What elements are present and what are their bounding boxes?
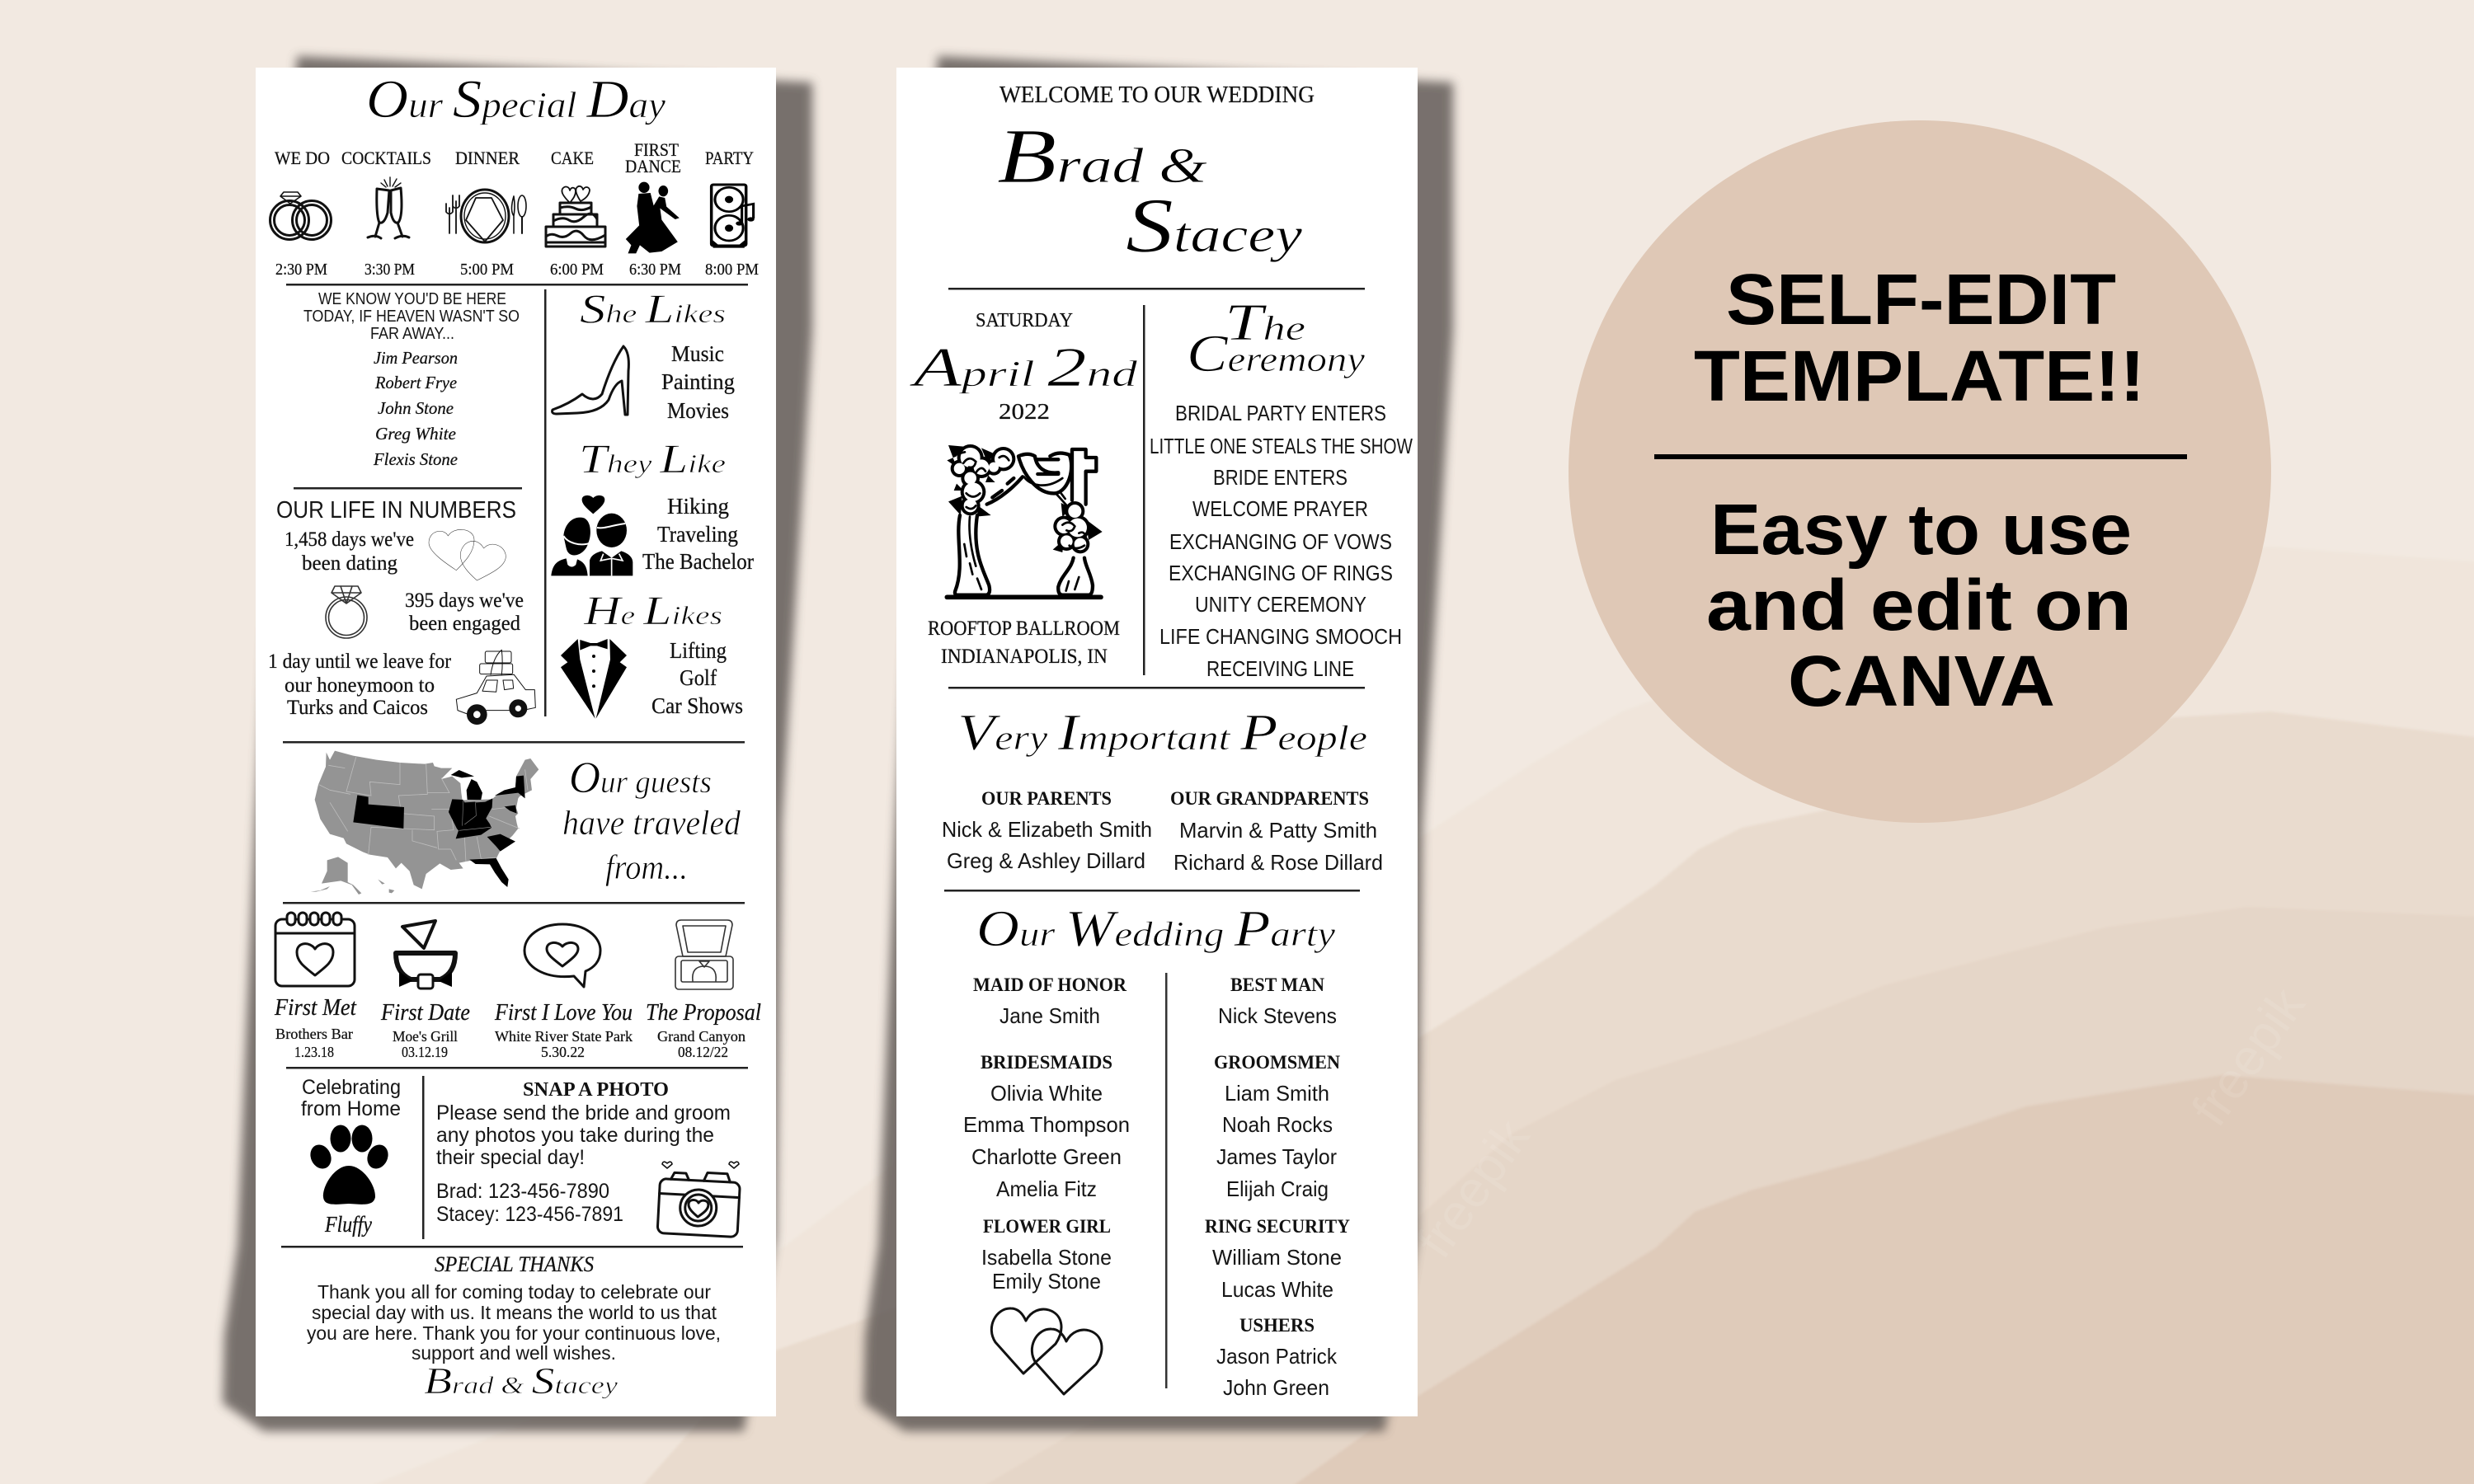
list: our grandparents: Marvin & Patty Smith: [1179, 818, 1377, 843]
heading: he likes: H e Likes: [583, 587, 722, 633]
list: groom's side: USHERS: [1239, 1315, 1315, 1336]
watermark: freepik: [1406, 977, 2316, 1268]
names: brad and stacey: Stacey: [1126, 183, 1302, 269]
date block: SATURDAY: [976, 310, 1073, 331]
list: our parents: Greg & Ashley Dillard: [947, 848, 1145, 873]
icon: nachos bowl: [396, 921, 455, 989]
list: ceremony order: EXCHANGING OF VOWS: [1169, 529, 1392, 554]
icon: interlocked hearts: [991, 1308, 1102, 1394]
list: he likes: [651, 638, 743, 718]
times: 5:00 PM: [460, 261, 514, 279]
list: bride's side: Charlotte Green: [971, 1144, 1122, 1169]
timeline labels: FIRST: [634, 139, 679, 160]
times: [275, 261, 759, 279]
captions: first date: Moe's Grill: [393, 1028, 458, 1045]
list: bride's side: FLOWER GIRL: [983, 1216, 1111, 1237]
map: guests travelled from US states: [311, 751, 539, 895]
list: ceremony order: BRIDE ENTERS: [1213, 465, 1348, 490]
heading: self-edit template: [1694, 260, 2145, 416]
text: thank you note: you are here. Thank you for your continuous love,: [307, 1322, 721, 1344]
signature: brad and stacey: Brad & Stacey: [424, 1360, 618, 1402]
heading: very important people: Very Important People: [957, 705, 1367, 761]
list: she likes: Movies: [667, 398, 729, 423]
list: they like: Hiking: [667, 494, 729, 519]
captions: first met: [274, 994, 357, 1060]
text: thank you note: [307, 1281, 721, 1364]
captions: first date: [380, 999, 470, 1060]
date block: [909, 310, 1138, 424]
list: bride's side: MAID OF HONOR: [973, 974, 1126, 995]
timeline labels: DINNER: [455, 148, 520, 168]
caption: fluffy: Fluffy: [324, 1212, 372, 1237]
text: easy to use and edit on canva: Easy to use: [1710, 490, 2132, 570]
watermark: freepik: freepik: [2181, 977, 2316, 1136]
captions: the proposal: The Proposal: [646, 999, 761, 1026]
text: remembrance note: WE KNOW YOU'D BE HERE: [318, 290, 506, 308]
captions: first i love you: First I Love You: [494, 999, 633, 1026]
captions: first i love you: White River State Park: [495, 1028, 633, 1045]
captions: first met: 1.23.18: [294, 1044, 334, 1060]
icon: dancing couple: [626, 182, 680, 253]
text: photo request: any photos you take during the: [436, 1124, 714, 1147]
names: brad and stacey: [997, 114, 1302, 269]
timeline labels: DANCE: [625, 156, 681, 176]
captions: the proposal: 08.12/22: [678, 1044, 728, 1060]
list: bride's side: Emily Stone: [992, 1269, 1101, 1294]
text: photo request: Please send the bride and groom: [436, 1101, 731, 1125]
times: 8:00 PM: [705, 261, 759, 279]
card shadow: left card: [223, 56, 812, 1431]
icon: couple with heart: [551, 495, 633, 575]
list: groom's side: Nick Stevens: [1218, 1003, 1337, 1028]
text: honeymoon countdown: 1 day until we leave for: [268, 650, 452, 673]
text: photo request: their special day!: [436, 1146, 585, 1169]
heading: snap a photo: SNAP A PHOTO: [523, 1079, 669, 1101]
panel: right program card: [896, 68, 1418, 1416]
captions: first date: First Date: [380, 999, 470, 1026]
list: groom's side: Elijah Craig: [1226, 1176, 1329, 1201]
list: ceremony order: RECEIVING LINE: [1206, 656, 1354, 681]
list: bride's side: BRIDESMAIDS: [981, 1052, 1112, 1073]
text: photo request: [436, 1101, 731, 1169]
heading: special thanks: SPECIAL THANKS: [435, 1252, 594, 1276]
list: groom's side: [1205, 974, 1350, 1400]
list: he likes: Car Shows: [651, 693, 743, 718]
captions: the proposal: [646, 999, 761, 1060]
times: 6:30 PM: [629, 261, 681, 279]
title: Our Special Day: Our Special Day: [366, 69, 666, 129]
list: groom's side: James Taylor: [1216, 1144, 1337, 1169]
list: bride's side: Jane Smith: [999, 1003, 1100, 1028]
times: 2:30 PM: [275, 261, 327, 279]
icon: speech bubble with heart: [524, 924, 600, 987]
list: bride's side: Olivia White: [990, 1081, 1103, 1106]
list: ceremony order: LIFE CHANGING SMOOCH: [1159, 624, 1402, 649]
list: groom's side: Noah Rocks: [1222, 1112, 1333, 1137]
text: days engaged: [405, 589, 524, 635]
heading: our guests have traveled from: [562, 753, 741, 887]
icon: speaker with music note: [712, 185, 755, 248]
list: groom's side: GROOMSMEN: [1214, 1052, 1340, 1073]
list: he likes: Lifting: [670, 638, 727, 663]
icon: dinner plate and cutlery: [446, 190, 526, 242]
text: remembered names: Jim Pearson: [374, 348, 458, 368]
list: ceremony order: BRIDAL PARTY ENTERS: [1175, 401, 1386, 425]
list: she likes: [661, 341, 735, 423]
list: they like: The Bachelor: [642, 549, 754, 574]
icon: diamond ring: [326, 586, 367, 638]
text: days engaged: been engaged: [409, 613, 520, 635]
list: our parents: OUR PARENTS: [981, 788, 1112, 809]
list: our grandparents: Richard & Rose Dillard: [1174, 850, 1383, 875]
icon: champagne glasses: [368, 177, 409, 238]
list: groom's side: William Stone: [1212, 1245, 1342, 1270]
card shadow: right card: [863, 56, 1453, 1431]
captions: first i love you: 5.30.22: [541, 1044, 585, 1060]
heading: the ceremony: T he: [1225, 293, 1305, 351]
times: 3:30 PM: [365, 261, 415, 279]
list: ceremony order: UNITY CEREMONY: [1195, 592, 1366, 617]
list: groom's side: Lucas White: [1221, 1277, 1333, 1302]
captions: first met: First Met: [274, 994, 357, 1021]
list: he likes: Golf: [680, 665, 717, 690]
icon: paw print: [307, 1125, 392, 1205]
text: days engaged: 395 days we've: [405, 589, 524, 612]
text: phone numbers: Brad: 123-456-7890: [436, 1180, 609, 1203]
timeline labels: WE DO: [275, 148, 330, 168]
list: bride's side: [963, 974, 1130, 1294]
list: groom's side: BEST MAN: [1230, 974, 1324, 995]
text: honeymoon countdown: [268, 650, 452, 719]
text: honeymoon countdown: our honeymoon to: [285, 674, 435, 697]
heading: they like: They Like: [579, 435, 726, 481]
icon: floral wedding arch: [947, 444, 1103, 597]
date block: A pril 2 nd: [909, 336, 1138, 398]
text: thank you note: special day with us. It means the world to us that: [312, 1302, 717, 1323]
watermark: freepik: freepik: [1406, 1109, 1541, 1268]
list: bride's side: Amelia Fitz: [996, 1176, 1097, 1201]
icon: outline hearts: [429, 529, 506, 580]
heading: the ceremony: [1187, 293, 1365, 383]
text: days dating: [285, 528, 414, 575]
heading: our guests have traveled from: have traveled: [562, 805, 741, 843]
list: our parents: Nick & Elizabeth Smith: [942, 817, 1152, 842]
text: celebrating from home: Celebrating: [302, 1076, 401, 1099]
heading: our guests have traveled from: Our guests: [569, 753, 712, 802]
list: ceremony order: LITTLE ONE STEALS THE SHOW: [1150, 434, 1413, 458]
text: remembered names: Flexis Stone: [373, 449, 458, 469]
list: groom's side: Jason Patrick: [1216, 1344, 1338, 1369]
list: she likes: Painting: [661, 369, 735, 394]
callout: self-edit template circle: [1569, 120, 2271, 823]
icon: car with luggage: [456, 650, 535, 721]
list: our parents: [942, 788, 1152, 873]
icon: camera with hearts: [657, 1162, 741, 1237]
heading: welcome to our wedding: WELCOME TO OUR WEDDING: [999, 82, 1315, 108]
panel: left program card: [256, 68, 776, 1416]
timeline labels: [275, 139, 754, 176]
list: our grandparents: OUR GRANDPARENTS: [1170, 788, 1369, 809]
list: groom's side: John Green: [1223, 1375, 1329, 1400]
list: groom's side: RING SECURITY: [1205, 1216, 1350, 1237]
list: groom's side: Liam Smith: [1225, 1081, 1329, 1106]
text: celebrating from home: [301, 1076, 401, 1120]
text: remembrance note: TODAY, IF HEAVEN WASN'T SO: [303, 308, 520, 326]
list: she likes: Music: [671, 341, 724, 366]
list: bride's side: Emma Thompson: [963, 1112, 1130, 1137]
text: remembered names: Robert Frye: [374, 373, 457, 392]
list: ceremony order: EXCHANGING OF RINGS: [1169, 561, 1393, 585]
text: remembrance note: FAR AWAY...: [370, 325, 454, 343]
text: thank you note: support and well wishes.: [412, 1342, 616, 1364]
icon: high heel: [553, 346, 628, 415]
text: days dating: 1,458 days we've: [285, 528, 414, 551]
heading: self-edit template: TEMPLATE!!: [1694, 336, 2145, 416]
text: celebrating from home: from Home: [301, 1097, 401, 1120]
text: easy to use and edit on canva: [1706, 490, 2132, 721]
arch flowers: [947, 444, 1103, 553]
icon: ring box: [675, 920, 733, 989]
list: they like: [642, 494, 754, 574]
text: easy to use and edit on canva: CANVA: [1788, 641, 2055, 721]
text: honeymoon countdown: Turks and Caicos: [287, 697, 428, 719]
times: 6:00 PM: [550, 261, 604, 279]
list: ceremony order: WELCOME PRAYER: [1192, 496, 1368, 521]
text: remembrance note: [303, 290, 520, 343]
timeline labels: CAKE: [551, 148, 594, 168]
icon: wedding cake: [546, 186, 605, 247]
icon: wedding rings: [270, 192, 332, 239]
captions: the proposal: Grand Canyon: [657, 1028, 745, 1045]
text: venue: ROOFTOP BALLROOM: [928, 618, 1120, 640]
text: phone numbers: Stacey: 123-456-7891: [436, 1203, 623, 1226]
list: our grandparents: [1170, 788, 1383, 875]
text: venue: [928, 618, 1120, 668]
text: venue: INDIANAPOLIS, IN: [941, 646, 1108, 668]
captions: first met: Brothers Bar: [275, 1026, 353, 1042]
heading: our life in numbers: OUR LIFE IN NUMBERS: [276, 497, 516, 524]
heading: our guests have traveled from: from...: [605, 849, 688, 887]
icon: tuxedo: [561, 639, 627, 719]
names: brad and stacey: Brad &: [997, 114, 1207, 200]
heading: self-edit template: SELF-EDIT: [1726, 260, 2116, 340]
list: ceremony order: [1150, 401, 1413, 681]
text: remembered names: [373, 348, 458, 469]
captions: first i love you: [494, 999, 633, 1060]
list: bride's side: Isabella Stone: [981, 1245, 1112, 1270]
heading: she likes: She Likes: [580, 285, 726, 331]
heading: the ceremony: Ceremony: [1187, 324, 1365, 383]
captions: first date: 03.12.19: [402, 1044, 448, 1060]
date block: 2022: [999, 399, 1050, 424]
text: phone numbers: [436, 1180, 623, 1226]
timeline labels: COCKTAILS: [341, 148, 431, 168]
text: remembered names: Greg White: [375, 424, 456, 444]
text: days dating: been dating: [302, 552, 397, 575]
text: remembered names: John Stone: [378, 398, 454, 418]
list: they like: Traveling: [657, 522, 738, 547]
text: easy to use and edit on canva: and edit on: [1706, 566, 2132, 646]
icon: calendar heart: [275, 913, 355, 986]
text: thank you note: Thank you all for coming today to celebrate our: [317, 1281, 711, 1303]
timeline labels: PARTY: [705, 148, 754, 168]
heading: our wedding party: Our Wedding Party: [976, 901, 1335, 957]
